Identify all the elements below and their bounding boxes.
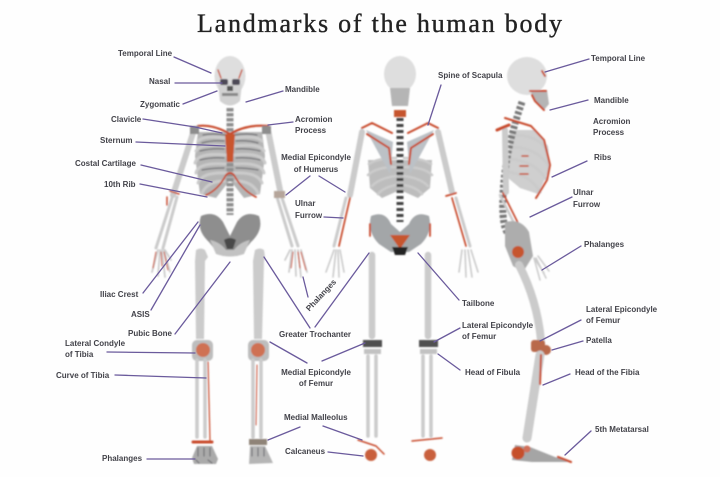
- labels: centre column: Process: [295, 126, 327, 135]
- labels: right column: Patella: [586, 336, 612, 345]
- labels: centre column: Calcaneus: [285, 447, 326, 456]
- labels: right column: Head of the Fibia: [575, 368, 640, 377]
- left arm and hand: [152, 126, 199, 277]
- labels: centre column: of Femur: [299, 379, 333, 388]
- skull back: [384, 56, 416, 117]
- labels: right column: Lateral Epicondyle: [586, 305, 658, 314]
- labels: centre column: Medial Epicondyle: [281, 153, 351, 162]
- back left arm: [326, 132, 362, 277]
- labels: left column: Curve of Tibia: [56, 371, 110, 380]
- side skull: [507, 57, 549, 110]
- labels: left column: ASIS: [131, 310, 150, 319]
- clavicle and sternum: [198, 126, 268, 197]
- right arm and hand: [262, 126, 307, 277]
- labels: right column: 5th Metatarsal: [595, 425, 649, 434]
- labels: left column: 10th Rib: [104, 180, 136, 189]
- labels: left column: of Tibia: [65, 350, 94, 359]
- labels: right column: Furrow: [573, 200, 601, 209]
- skeleton: back view: [326, 56, 478, 461]
- labels: back view: Spine of Scapula: [438, 71, 503, 80]
- labels: left column: Sternum: [100, 136, 132, 145]
- labels: centre column: Mandible: [285, 85, 320, 94]
- skeleton: front view: [152, 56, 307, 464]
- labels: centre column: Ulnar: [295, 199, 315, 208]
- labels: centre column: of Humerus: [294, 165, 339, 174]
- labels: left column: [56, 49, 181, 463]
- back right leg: [412, 255, 442, 461]
- labels: back view: Tailbone: [462, 299, 495, 308]
- labels: right column: Process: [593, 128, 625, 137]
- side leg: [519, 265, 551, 438]
- scapulae: [362, 123, 438, 174]
- labels: right column: Ulnar: [573, 188, 593, 197]
- labels: left column: Temporal Line: [118, 49, 173, 58]
- labels: back view: [438, 71, 534, 377]
- labels: back view: Lateral Epicondyle: [462, 321, 534, 330]
- spine and ribs: [368, 118, 432, 222]
- side pelvis: [505, 221, 533, 272]
- skull: [214, 56, 246, 106]
- pelvis: [200, 214, 260, 256]
- labels: centre column: Medial Epicondyle: [281, 368, 351, 377]
- back left leg: [358, 255, 384, 461]
- labels: centre column: Greater Trochanter: [279, 330, 351, 339]
- labels: centre column: Medial Malleolus: [284, 413, 348, 422]
- right leg: [248, 248, 273, 464]
- labels: back view: of Femur: [462, 332, 496, 341]
- side arm: [497, 125, 549, 280]
- labels: left column: Costal Cartilage: [75, 159, 136, 168]
- labels: right column: Temporal Line: [591, 54, 646, 63]
- labels: left column: Zygomatic: [140, 100, 181, 109]
- back pelvis: [370, 214, 430, 255]
- labels: left column: Iliac Crest: [100, 290, 139, 299]
- back right arm: [438, 132, 478, 277]
- labels: left column: Phalanges: [102, 454, 143, 463]
- labels: centre column: Acromion: [295, 115, 332, 124]
- labels: centre column: [279, 85, 351, 456]
- left leg: [192, 248, 218, 464]
- labels: right column: Phalanges: [584, 240, 625, 249]
- side spine and ribs: [503, 102, 550, 236]
- title: Landmarks of the human body: [197, 9, 562, 38]
- labels: left column: Pubic Bone: [128, 329, 173, 338]
- labels: right column: Mandible: [594, 96, 629, 105]
- labels: left column: Nasal: [149, 77, 170, 86]
- skeleton: side view: [497, 57, 572, 462]
- labels: right column: [573, 54, 658, 434]
- labels: left column: Lateral Condyle: [65, 339, 126, 348]
- labels: centre column: Furrow: [295, 211, 323, 220]
- labels: back view: Head of Fibula: [465, 368, 521, 377]
- labels: left column: Clavicle: [111, 115, 142, 124]
- labels: right column: of Femur: [586, 316, 620, 325]
- labels: centre column: Phalanges: [304, 277, 338, 313]
- side foot: [512, 445, 572, 462]
- labels: right column: Ribs: [594, 153, 612, 162]
- spine and rib cage: [195, 108, 265, 215]
- labels: right column: Acromion: [593, 117, 630, 126]
- leader lines: [107, 57, 591, 459]
